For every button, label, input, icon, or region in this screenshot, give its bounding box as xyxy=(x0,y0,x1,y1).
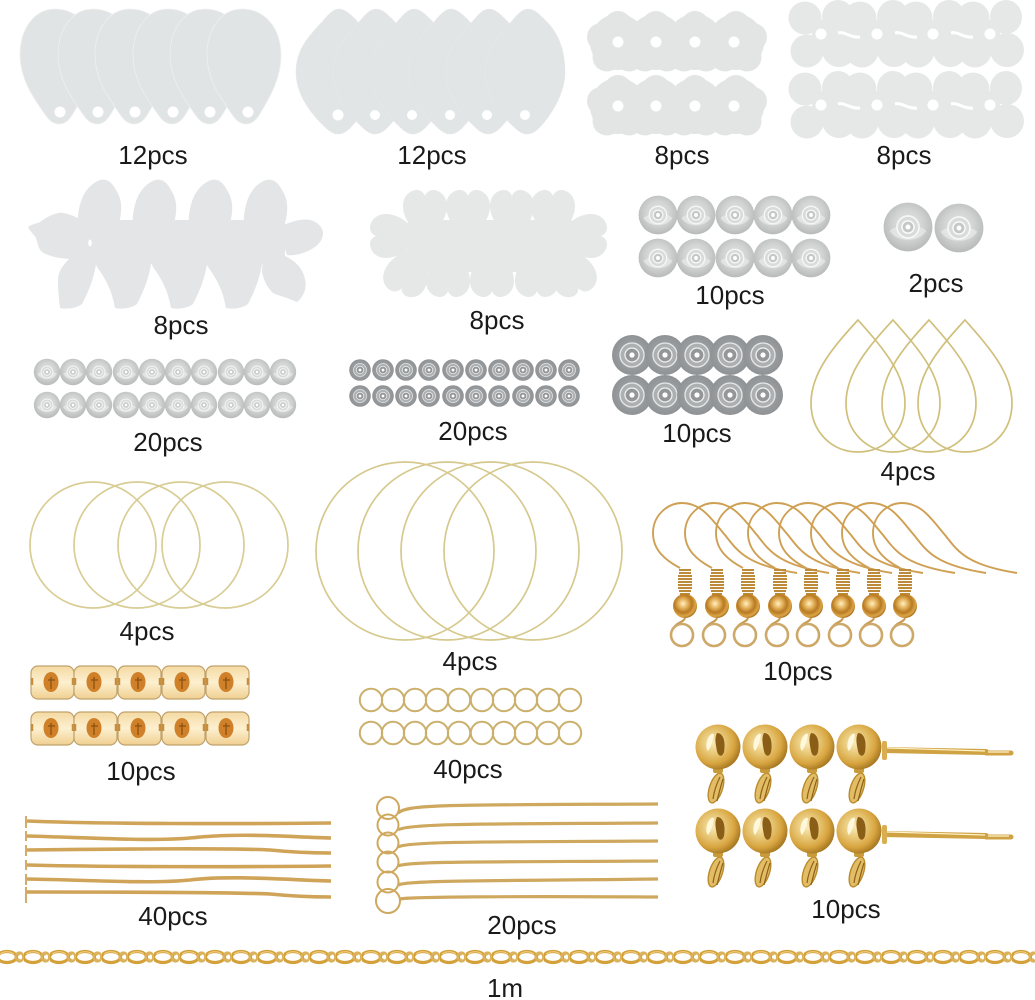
panel: small gold hoops 4pcs xyxy=(30,482,288,646)
label: 10pcs: 10pcs xyxy=(695,280,765,310)
small grey beads xyxy=(349,359,580,407)
gold ball studs with loops xyxy=(696,724,1011,889)
large gold hoops xyxy=(316,462,622,640)
panel: ball stud earrings 10pcs xyxy=(696,724,1011,924)
label: 8pcs: 8pcs xyxy=(655,140,709,170)
small clear beads xyxy=(34,359,296,418)
panel: large gold hoops 4pcs xyxy=(316,462,622,676)
panel: teardrop petals 12pcs xyxy=(20,9,281,170)
panel: small clear beads 20pcs xyxy=(34,359,296,457)
label: 10pcs: 10pcs xyxy=(662,418,732,448)
small gold hoops xyxy=(30,482,288,608)
scalloped flower beads xyxy=(587,11,767,136)
panel: jump rings 40pcs xyxy=(360,689,581,784)
panel: gold teardrop frames 4pcs xyxy=(811,320,1012,486)
panel: clear beads 2pcs xyxy=(884,203,983,298)
teardrop petal charms xyxy=(20,9,281,124)
label: 8pcs: 8pcs xyxy=(877,140,931,170)
gold head pins xyxy=(26,816,331,903)
panel: ear hooks 10pcs xyxy=(653,503,1017,686)
panel: eye pins 20pcs xyxy=(376,797,658,940)
label: 2pcs: 2pcs xyxy=(909,268,963,298)
gold fish ear hooks xyxy=(653,503,1017,646)
panel: ear nuts 10pcs xyxy=(31,666,249,786)
leaf petal charms xyxy=(296,9,565,134)
five-petal flower beads xyxy=(28,180,323,309)
clear ear nut beads xyxy=(639,196,830,277)
label: 12pcs: 12pcs xyxy=(397,140,467,170)
panel: gold chain 1m xyxy=(0,945,1035,1000)
gold eye pins xyxy=(376,797,658,913)
label: 20pcs: 20pcs xyxy=(133,427,203,457)
panel: heart petal flowers 8pcs xyxy=(370,190,607,335)
gold teardrop wire frames xyxy=(811,320,1012,452)
four-petal flower beads xyxy=(788,0,1024,138)
panel: large grey beads 10pcs xyxy=(612,335,783,448)
label: 20pcs: 20pcs xyxy=(487,910,557,940)
label: 40pcs: 40pcs xyxy=(138,901,208,931)
label: 40pcs: 40pcs xyxy=(433,754,503,784)
label: 12pcs: 12pcs xyxy=(118,140,188,170)
panel: large five-petal flowers 8pcs xyxy=(28,180,323,340)
panel: small grey beads 20pcs xyxy=(349,359,580,446)
label: 20pcs: 20pcs xyxy=(438,416,508,446)
panel: head pins 40pcs xyxy=(26,816,331,931)
gold cable chain xyxy=(0,945,1035,969)
label: 8pcs: 8pcs xyxy=(154,310,208,340)
label: 4pcs: 4pcs xyxy=(120,616,174,646)
panel: clover flowers 8pcs xyxy=(788,0,1024,170)
panel: rounded leaf petals 12pcs xyxy=(296,9,565,170)
gold ear nuts xyxy=(31,666,249,745)
heart-petal flower beads xyxy=(370,190,607,301)
label: 8pcs: 8pcs xyxy=(470,305,524,335)
large grey beads xyxy=(612,335,783,415)
label: 10pcs: 10pcs xyxy=(763,656,833,686)
label: 4pcs: 4pcs xyxy=(443,646,497,676)
label: 10pcs: 10pcs xyxy=(106,756,176,786)
large clear beads xyxy=(884,203,983,252)
label: 4pcs: 4pcs xyxy=(881,456,935,486)
label: 10pcs: 10pcs xyxy=(811,894,881,924)
gold jump rings xyxy=(360,689,581,744)
panel: clear beads 10pcs xyxy=(639,196,830,310)
panel: round flower caps 8pcs xyxy=(587,11,767,170)
